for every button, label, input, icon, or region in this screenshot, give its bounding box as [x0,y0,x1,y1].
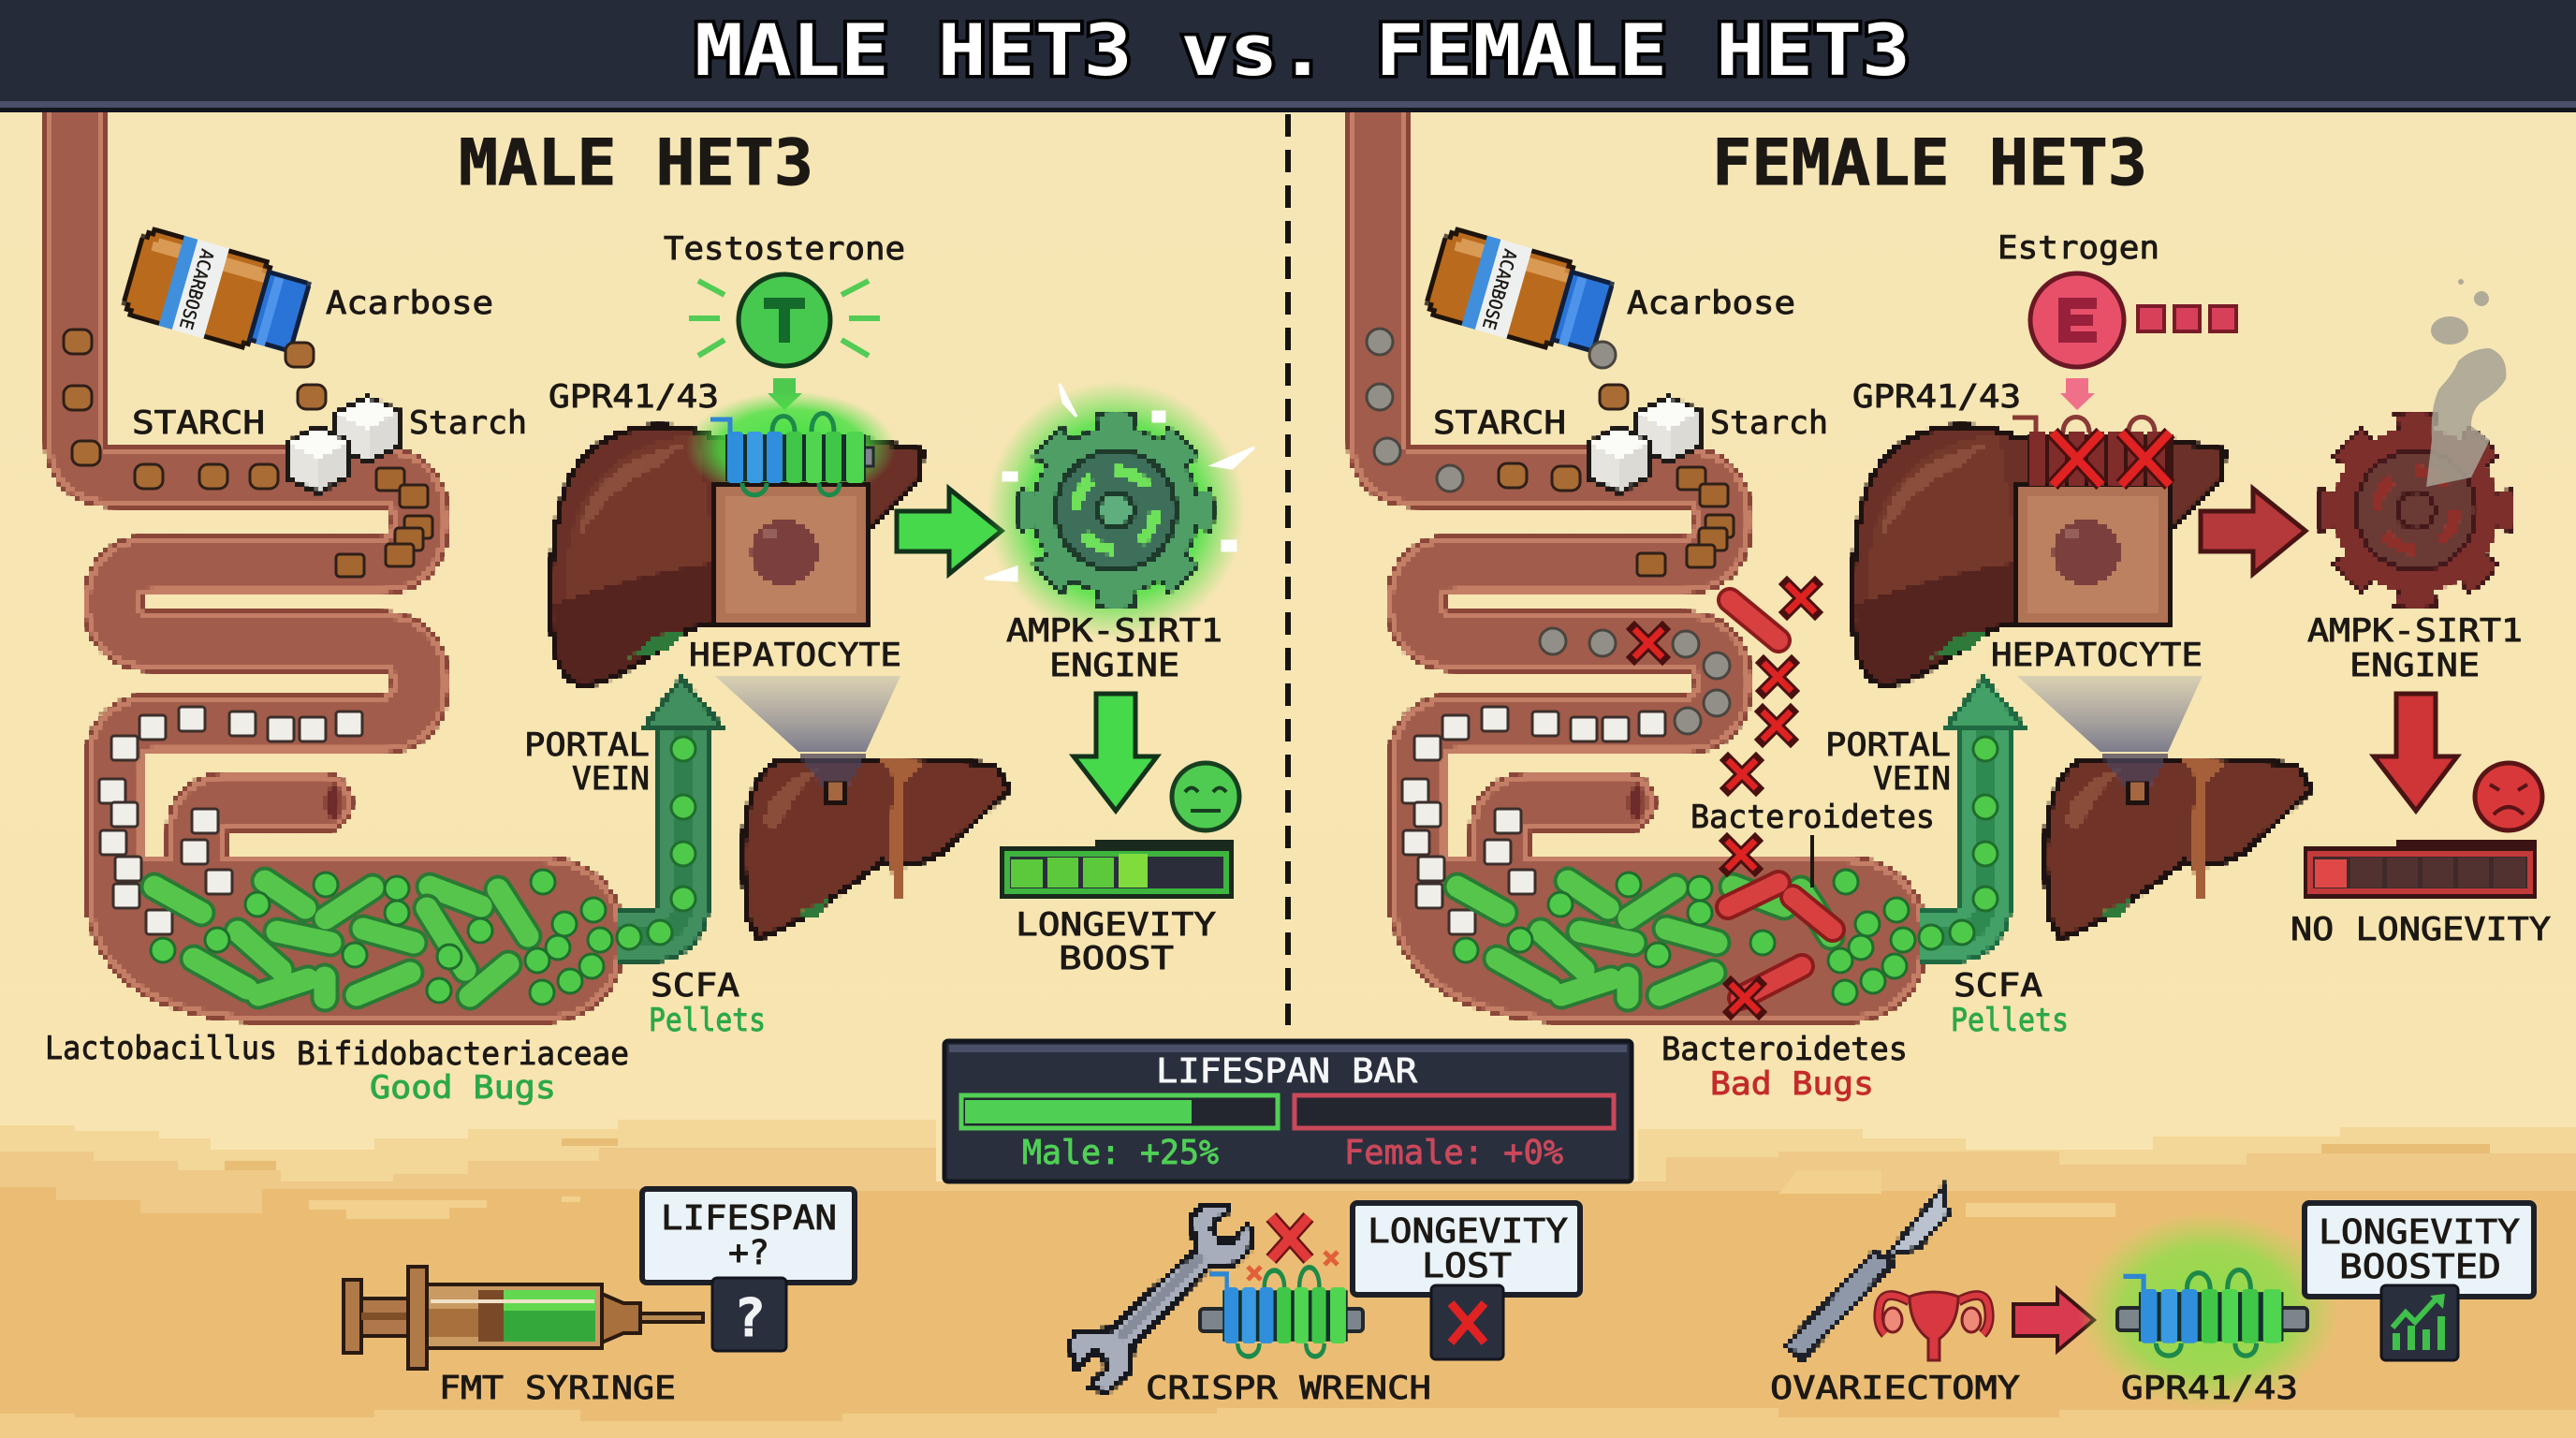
heading: male: MALE HET3 [459,126,813,200]
icon: receptor being edited [1200,1268,1363,1357]
label: PORTAL VEIN: PORTAL [1825,726,1951,764]
header bar [0,0,2576,112]
label: Bad Bugs: Bad Bugs [1710,1065,1874,1103]
label: AMPK-SIRT1 ENGINE [1006,612,1222,684]
label: AMPK-SIRT1 ENGINE [2307,612,2523,684]
acarbose pills in gut [1367,329,1734,734]
magnification cone [2017,676,2203,752]
label: Bacteroidetes lower: Bacteroidetes [1661,1031,1908,1068]
arrow: ovariectomy to receptor [2013,1289,2094,1351]
label: OVARIECTOMY: OVARIECTOMY [1770,1370,2020,1407]
icon: rising chart box [2381,1285,2458,1360]
acarbose bottle: ACARBOSE [175,247,217,331]
icon: glowing gear engine [985,381,1254,639]
icon: wrench [1069,1205,1251,1392]
small liver [2045,755,2311,937]
icon: glowing receptor [2078,1212,2340,1409]
bar: female [1295,1095,1614,1128]
title: MALE HET3 vs. FEMALE HET3 [695,8,1910,92]
small liver [743,755,1009,937]
label: NO LONGEVITY: NO LONGEVITY [2291,911,2551,948]
starch pieces in gut [99,707,362,934]
panel: ovariectomy experiment [1770,1187,2534,1409]
label: LONGEVITY BOOST [1016,906,1216,977]
arrow: estrogen to receptor [2060,378,2095,410]
bacteria: surviving good bugs [1454,870,1944,1005]
label: CRISPR WRENCH: CRISPR WRENCH [1146,1370,1431,1407]
acarbose bottle [122,227,312,360]
panel: FMT syringe experiment [344,1189,855,1407]
arrow: to longevity [1074,694,1157,811]
longevity bar: none [2304,840,2537,899]
label: AMPK-SIRT1 ENGINE: ENGINE [2349,647,2480,684]
callout: longevity boosted: LONGEVITY [2319,1213,2520,1252]
panel: CRISPR wrench experiment [1069,1203,1580,1407]
callout: lifespan +? [642,1189,855,1283]
icon: uterus [1879,1292,1989,1360]
divider between male and female panels [1285,114,1291,1025]
magnification cone [715,676,900,752]
receptor: GPR41/43 blocked [2012,418,2174,486]
label: AMPK-SIRT1 ENGINE: AMPK-SIRT1 [2307,612,2523,650]
label: STARCH: STARCH [132,404,265,442]
icon: X box [1431,1285,1503,1359]
label: GPR41/43: GPR41/43 [1852,378,2021,416]
icon: testosterone hormone [689,274,880,366]
label: Starch: Starch [409,404,527,442]
intestine: male [75,112,594,993]
label: GPR41/43: GPR41/43 [2121,1370,2298,1407]
label: Estrogen: Estrogen [1998,229,2159,267]
icon: frowny [2475,763,2542,830]
icon: smiley [1172,763,1239,830]
arrow: to engine [897,489,1002,574]
acarbose bottle [1425,227,1615,360]
label: acarbose: Acarbose [1627,285,1795,322]
callout: longevity lost: LOST [1422,1247,1512,1285]
liver with hepatocyte [1852,426,2225,684]
label: female +0%: Female: +0% [1344,1134,1563,1172]
arrow: to engine [2201,489,2305,574]
icon: question mark box: ? [734,1288,766,1349]
bacteria: bad bugs and red crosses [1634,584,1833,1012]
receptor: GPR41/43 active [710,414,873,495]
callout: longevity boosted: BOOSTED [2339,1248,2501,1286]
callout: longevity lost: LONGEVITY [1368,1212,1568,1251]
liver with hepatocyte [550,391,923,684]
label: acarbose: Acarbose [326,285,493,322]
label: PORTAL VEIN: PORTAL [524,726,650,764]
good bacteria [151,870,641,1005]
callout: lifespan +?: +? [728,1234,769,1272]
starch cubes [1588,397,1701,492]
background: sand ground [0,1120,2576,1438]
starch pieces in gut [1402,707,1665,934]
label: PORTAL VEIN [1825,726,1951,798]
bar: male [961,1095,1278,1128]
label: PORTAL VEIN: VEIN [1873,760,1951,798]
icon: scalpel [1786,1187,1948,1359]
arrow: to no longevity [2374,694,2457,811]
label: SCFA Pellets [1951,967,2069,1039]
heading: lifespan bar: LIFESPAN BAR [1156,1052,1417,1091]
starch cubes [286,397,400,492]
label: Bifidobacteriaceae: Bifidobacteriaceae [297,1035,629,1073]
longevity bar: boost [1000,840,1234,899]
arrow: testosterone to receptor [768,378,802,410]
label: HEPATOCYTE: HEPATOCYTE [689,637,901,674]
label: SCFA Pellets: SCFA [651,967,739,1005]
callout: longevity lost [1353,1203,1580,1295]
callout: longevity boosted [2305,1203,2534,1297]
label: Testosterone: Testosterone [664,230,905,268]
label: SCFA Pellets: Pellets [649,1002,766,1039]
label: Bacteroidetes upper: Bacteroidetes [1690,799,1935,836]
acarbose pills in gut [64,330,432,577]
arrow: portal vein [1919,679,2025,949]
label: AMPK-SIRT1 ENGINE: AMPK-SIRT1 [1006,612,1222,650]
label: LONGEVITY BOOST: LONGEVITY [1016,906,1216,944]
acarbose bottle: ACARBOSE [1478,247,1520,331]
label: GPR41/43: GPR41/43 [549,378,719,416]
label: PORTAL VEIN [524,726,650,798]
callout: lifespan +?: LIFESPAN [661,1199,837,1238]
arrow: portal vein [617,679,723,949]
icon: estrogen hormone [2030,273,2236,367]
label: LONGEVITY BOOST: BOOST [1059,940,1174,977]
panel: male HET3 [45,112,1254,1107]
label: PORTAL VEIN: VEIN [572,760,650,798]
panel: lifespan bar [944,1041,1632,1181]
label: Lactobacillus: Lactobacillus [45,1030,277,1067]
intestine: female [1378,112,1897,993]
label: HEPATOCYTE: HEPATOCYTE [1991,637,2203,674]
label: Good Bugs: Good Bugs [370,1069,556,1107]
icon: smoking broken gear [2330,279,2506,596]
heading: female: FEMALE HET3 [1712,126,2147,200]
label: male +25%: Male: +25% [1022,1134,1219,1172]
label: FMT SYRINGE: FMT SYRINGE [439,1370,676,1407]
panel: female HET3 [1367,112,2551,1103]
icon: question mark box [712,1278,786,1351]
label: SCFA Pellets [649,967,766,1039]
icon: syringe [344,1267,703,1369]
label: AMPK-SIRT1 ENGINE: ENGINE [1049,647,1179,684]
label: STARCH: STARCH [1433,404,1566,442]
icon: red crosses [1248,1217,1338,1280]
label: SCFA Pellets: Pellets [1951,1002,2069,1039]
label: Starch: Starch [1710,404,1828,442]
label: SCFA Pellets: SCFA [1954,967,2042,1005]
